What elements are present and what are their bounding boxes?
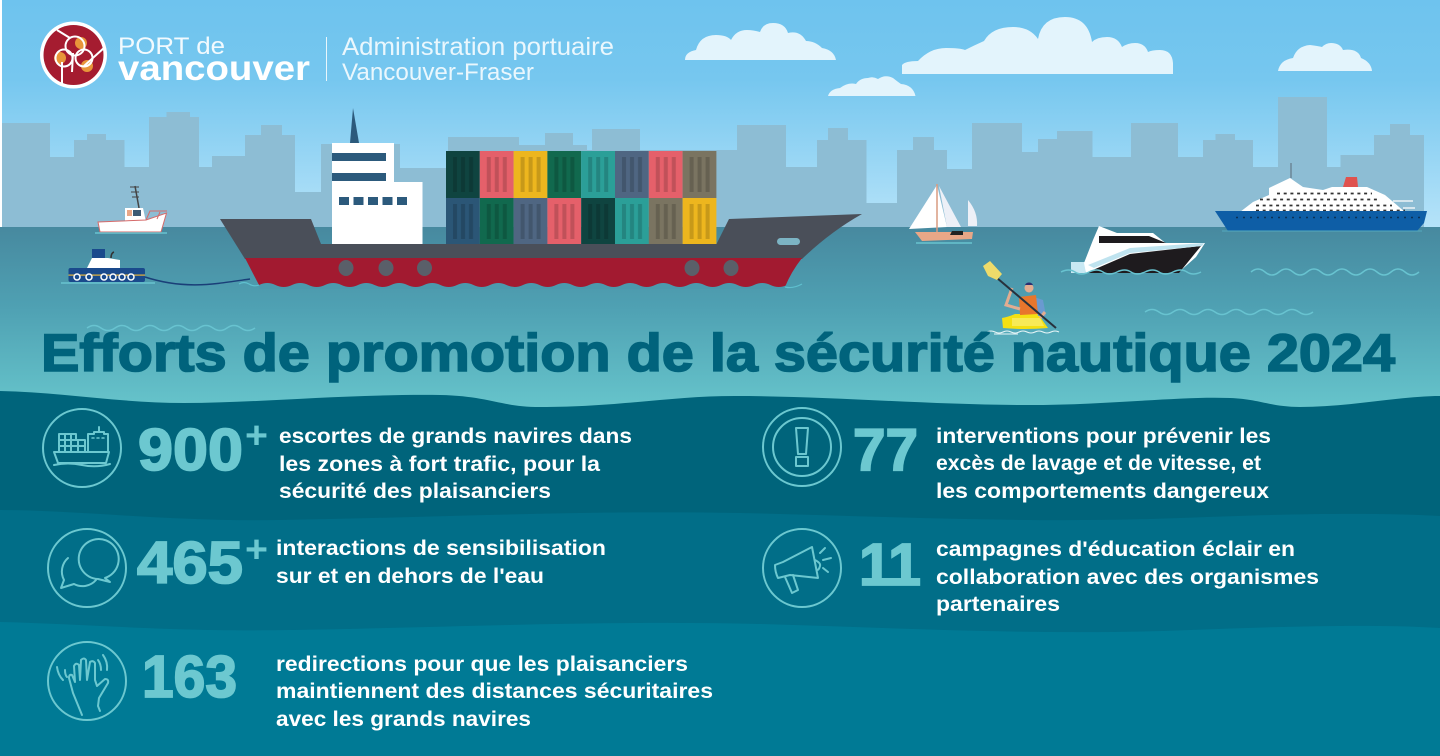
description: interactions de sensibilisation [276,537,606,560]
motor yacht [1061,226,1205,274]
stat: 465+ interactions: 465 [137,530,243,596]
description [936,538,1319,616]
title: Efforts de promotion de la sécurité nautique 2024 [41,324,1396,383]
wave band 3 [0,622,1440,756]
description: interventions pour prévenir les [936,425,1271,448]
logo emblem [40,22,107,88]
description [279,425,632,503]
portholes [338,260,354,276]
authority name: Administration portuaire [342,33,614,61]
description: collaboration avec des organismes [936,566,1319,589]
fishing boat [95,186,167,233]
cargo ship [220,108,862,289]
description: les zones à fort trafic, pour la [279,453,600,476]
bow slot [777,238,800,245]
description [276,537,606,588]
stat: 900+ escorts: + [245,415,268,457]
logo: Port de Vancouver: Vancouver-Fraser [342,59,534,86]
description: campagnes d'éducation éclair en [936,538,1295,561]
description: excès de lavage et de vitesse, et [936,452,1261,475]
kayaker [983,261,1059,334]
cruise ship [1215,163,1427,231]
icon: megaphone [763,529,841,607]
logo: Port de Vancouver [40,22,614,88]
stat: 11 campaigns [763,529,1319,616]
description: maintiennent des distances sécuritaires [276,680,713,703]
wordmark: PORT de: PORT de [118,33,225,60]
wave lines on water [87,269,1419,330]
cloud: small [828,76,916,96]
description: redirections pour que les plaisanciers [276,653,688,676]
stat: 900+ escorts: 900 [138,417,243,483]
grey upper hull [220,214,862,259]
cloud: top centre-left [685,23,836,60]
cloud: right [1278,43,1372,71]
stat: 77 interventions: 77 [853,417,918,483]
tug boat with tow line [61,249,250,285]
bridge superstructure [332,143,422,245]
icon: cargo ship [43,409,121,487]
sky background [0,0,1440,228]
stat: 77 interventions [763,408,1271,503]
wave band 1 [0,391,1440,756]
stat: 465+ interactions: + [245,529,268,571]
stat: 900+ escorts [43,409,632,503]
icon: waving hand [48,642,126,720]
sailboat [909,184,977,243]
water scallops at waterline [259,283,787,289]
icon: speech bubbles [48,529,126,607]
city skyline [2,97,1424,227]
waterline ripples at stern and bow [239,282,802,288]
description [936,425,1271,503]
stat: 11 campaigns: 11 [859,532,921,598]
stat: 163 redirections: 163 [142,644,237,710]
description: avec les grands navires [276,708,531,731]
description: les comportements dangereux [936,480,1269,503]
wordmark: vancouver: vancouver [118,49,310,88]
icon: exclamation mark [763,408,841,486]
description: sur et en dehors de l'eau [276,565,544,588]
description [276,653,713,731]
description: partenaires [936,593,1060,616]
antenna mast [350,108,359,143]
cloud: large [902,17,1173,74]
description: escortes de grands navires dans [279,425,632,448]
sea [0,227,1440,407]
stat: 163 redirections [48,642,713,731]
description: sécurité des plaisanciers [279,480,551,503]
stat: 465+ interactions [48,529,606,607]
red lower hull [245,258,802,287]
container stack [446,151,716,245]
wave band 2 [0,510,1440,756]
